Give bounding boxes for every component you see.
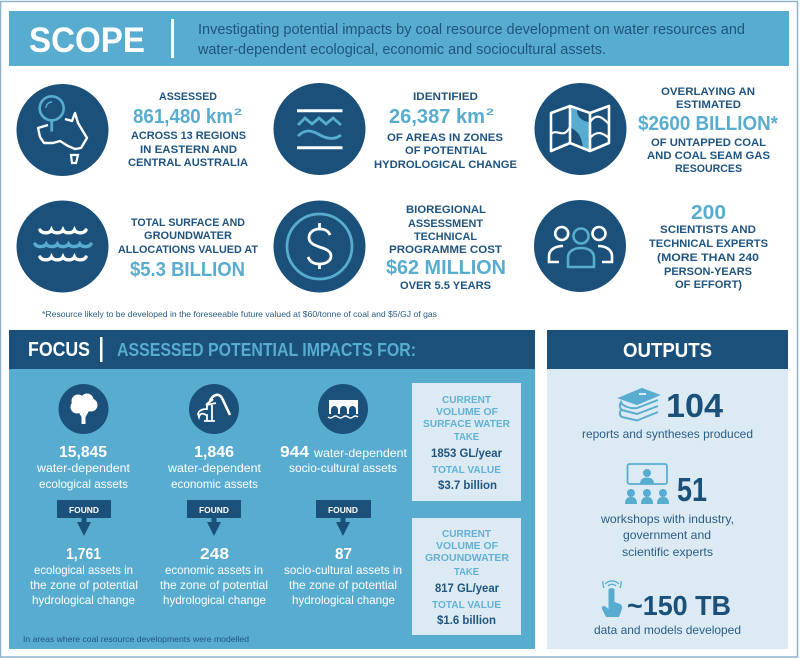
focus footnote: In areas where coal resource developments were modelled — [23, 634, 249, 644]
stat: scientists — [649, 202, 768, 291]
stat: programme cost: ASSESSMENT — [408, 218, 483, 230]
stat: scientists: 200 — [691, 202, 726, 224]
stat: identified area: OF AREAS IN ZONES — [387, 132, 503, 144]
icon: books — [620, 389, 658, 420]
stat: scientists: PERSON-YEARS — [664, 266, 752, 278]
icon: map — [534, 83, 626, 175]
column: socio-cultural assets: water-dependent — [313, 446, 408, 460]
column: ecological assets: water-dependent — [36, 461, 131, 475]
stat: water allocations: GROUNDWATER — [144, 230, 232, 242]
icon: touch hand — [602, 581, 622, 617]
subheading: assessed potential impacts: ASSESSED POTENTIAL IMPACTS FOR: — [117, 339, 416, 360]
panel: outputs — [547, 330, 788, 649]
panel: scope header — [9, 11, 789, 66]
stat: scientists: (MORE THAN 240 — [657, 252, 759, 264]
card: groundwater take: TOTAL VALUE — [432, 599, 501, 611]
output: data: data and models developed — [594, 623, 741, 637]
stat: programme cost: $62 MILLION — [386, 257, 506, 279]
found arrow — [187, 500, 241, 536]
stat: assessed area: 861,480 km — [133, 106, 233, 128]
found arrow: FOUND — [69, 505, 99, 515]
column: economic assets: hydrological change — [163, 593, 266, 607]
stat: programme cost: OVER 5.5 YEARS — [400, 280, 491, 292]
scope description: water-dependent ecological, economic and sociocultural assets. — [197, 41, 606, 58]
found arrow: FOUND — [199, 505, 229, 515]
card: groundwater take: $1.6 billion — [437, 613, 496, 627]
column: socio-cultural assets: the zone of potential — [289, 578, 397, 592]
stat: programme cost: PROGRAMME COST — [389, 244, 502, 256]
output: workshops: government and — [623, 528, 711, 542]
stat: water allocations: TOTAL SURFACE AND — [131, 217, 245, 229]
column: socio-cultural assets: 87 — [335, 546, 352, 563]
stat: programme cost — [386, 204, 506, 292]
panel: focus — [9, 330, 535, 649]
icon: people — [534, 200, 626, 292]
card: groundwater take: 817 GL/year — [435, 581, 499, 595]
icon: tree — [58, 384, 108, 434]
stat: untapped resources: RESOURCES — [675, 163, 742, 175]
stat: programme cost: BIOREGIONAL — [406, 204, 486, 216]
stat: identified area: HYDROLOGICAL CHANGE — [374, 159, 517, 171]
stat: assessed area: ASSESSED — [159, 91, 217, 103]
found arrow — [316, 500, 371, 536]
output: workshops: scientific experts — [622, 545, 713, 559]
column: ecological assets: 1,761 — [66, 546, 101, 563]
column: socio-cultural assets: socio-cultural assets in — [284, 563, 402, 577]
card: surface water take: VOLUME OF — [436, 406, 499, 418]
column: economic assets: economic assets — [171, 477, 258, 491]
stat: assessed area: IN EASTERN AND — [140, 144, 237, 156]
stat: untapped resources: AND COAL SEAM GAS — [647, 150, 770, 162]
card: surface water take: SURFACE WATER — [423, 418, 510, 430]
found arrow — [57, 500, 111, 536]
column: socio-cultural assets: socio-cultural assets — [289, 461, 397, 475]
column: ecological assets: the zone of potential — [30, 578, 138, 592]
output: data — [594, 581, 741, 637]
column: socio-cultural assets: 944 — [280, 444, 309, 461]
footnote: *Resource likely to be developed in the foreseeable future valued at $60/tonne of coal and $5/GJ of gas — [42, 309, 437, 319]
card: surface water take: TAKE — [454, 431, 479, 443]
stat: identified area: 26,387 km — [389, 106, 485, 128]
stat: water allocations: ALLOCATIONS VALUED AT — [118, 244, 258, 256]
card: groundwater take: CURRENT — [442, 528, 492, 540]
stat: identified area: 2 — [486, 107, 494, 117]
output: reports — [582, 387, 753, 441]
stat: water allocations — [118, 217, 258, 281]
stat: programme cost: TECHNICAL — [414, 231, 477, 243]
stat: assessed area: ACROSS 13 REGIONS — [131, 130, 246, 142]
output: reports: 104 — [666, 387, 724, 424]
heading: scope: SCOPE — [29, 21, 145, 60]
icon: water waves — [16, 200, 108, 292]
heading: focus: FOCUS — [28, 339, 90, 361]
column: ecological assets: ecological assets — [39, 477, 128, 491]
output: workshops: workshops with industry, — [600, 512, 734, 526]
icon: hydrological lines — [274, 83, 366, 175]
column: economic assets: 248 — [200, 546, 229, 563]
column: socio-cultural assets: hydrological change — [292, 593, 395, 607]
stat: assessed area: 2 — [234, 107, 242, 117]
stat: scientists: OF EFFORT) — [675, 279, 742, 291]
scope description: Investigating potential impacts by coal resource development on water resources and — [198, 21, 745, 38]
stat: untapped resources: $2600 BILLION* — [638, 113, 778, 135]
card: surface water take: 1853 GL/year — [431, 446, 502, 460]
output: reports: reports and syntheses produced — [582, 427, 753, 441]
card: groundwater take: TAKE — [454, 566, 479, 578]
stat: identified area: IDENTIFIED — [413, 91, 478, 103]
column: ecological assets: hydrological change — [32, 593, 135, 607]
stat: identified area — [374, 91, 517, 171]
stat: scientists: SCIENTISTS AND — [660, 224, 756, 236]
stat: untapped resources: ESTIMATED — [676, 99, 741, 111]
card: groundwater take: GROUNDWATER — [425, 552, 509, 564]
scope description — [197, 21, 745, 58]
stat: assessed area — [128, 91, 248, 169]
output: data: ~150 TB — [627, 590, 731, 621]
column: ecological assets: 15,845 — [59, 444, 107, 461]
icon: australia with magnifier — [16, 84, 108, 176]
stat: assessed area: CENTRAL AUSTRALIA — [128, 157, 248, 169]
card: surface water take: TOTAL VALUE — [432, 464, 501, 476]
column: economic assets: economic assets in — [165, 563, 263, 577]
card: surface water take: $3.7 billion — [438, 478, 497, 492]
column: ecological assets: ecological assets in — [34, 563, 133, 577]
card: surface water take — [412, 383, 521, 501]
column: economic assets: water-dependent — [167, 461, 262, 475]
stat: untapped resources: OF UNTAPPED COAL — [651, 137, 766, 149]
stat: identified area: OF POTENTIAL — [405, 145, 487, 157]
icon: presentation audience — [625, 464, 669, 504]
stat: untapped resources: OVERLAYING AN — [661, 86, 755, 98]
heading: outputs: OUTPUTS — [623, 340, 712, 362]
icon: water pump — [189, 384, 239, 434]
card: groundwater take — [412, 518, 521, 635]
card: surface water take: CURRENT — [442, 394, 492, 406]
column: economic assets: 1,846 — [194, 444, 234, 461]
found arrow: FOUND — [328, 505, 358, 515]
stat: water allocations: $5.3 BILLION — [130, 259, 245, 281]
column: socio-cultural assets — [280, 384, 408, 607]
output: workshops — [600, 464, 734, 559]
column: economic assets: the zone of potential — [160, 578, 268, 592]
column: ecological assets — [30, 384, 138, 607]
output: workshops: 51 — [677, 471, 707, 508]
icon: bridge — [318, 384, 368, 434]
stat: untapped resources — [638, 86, 778, 175]
card: groundwater take: VOLUME OF — [436, 540, 499, 552]
icon: dollar — [274, 200, 366, 292]
stat: scientists: TECHNICAL EXPERTS — [649, 238, 768, 250]
column: economic assets — [160, 384, 268, 607]
